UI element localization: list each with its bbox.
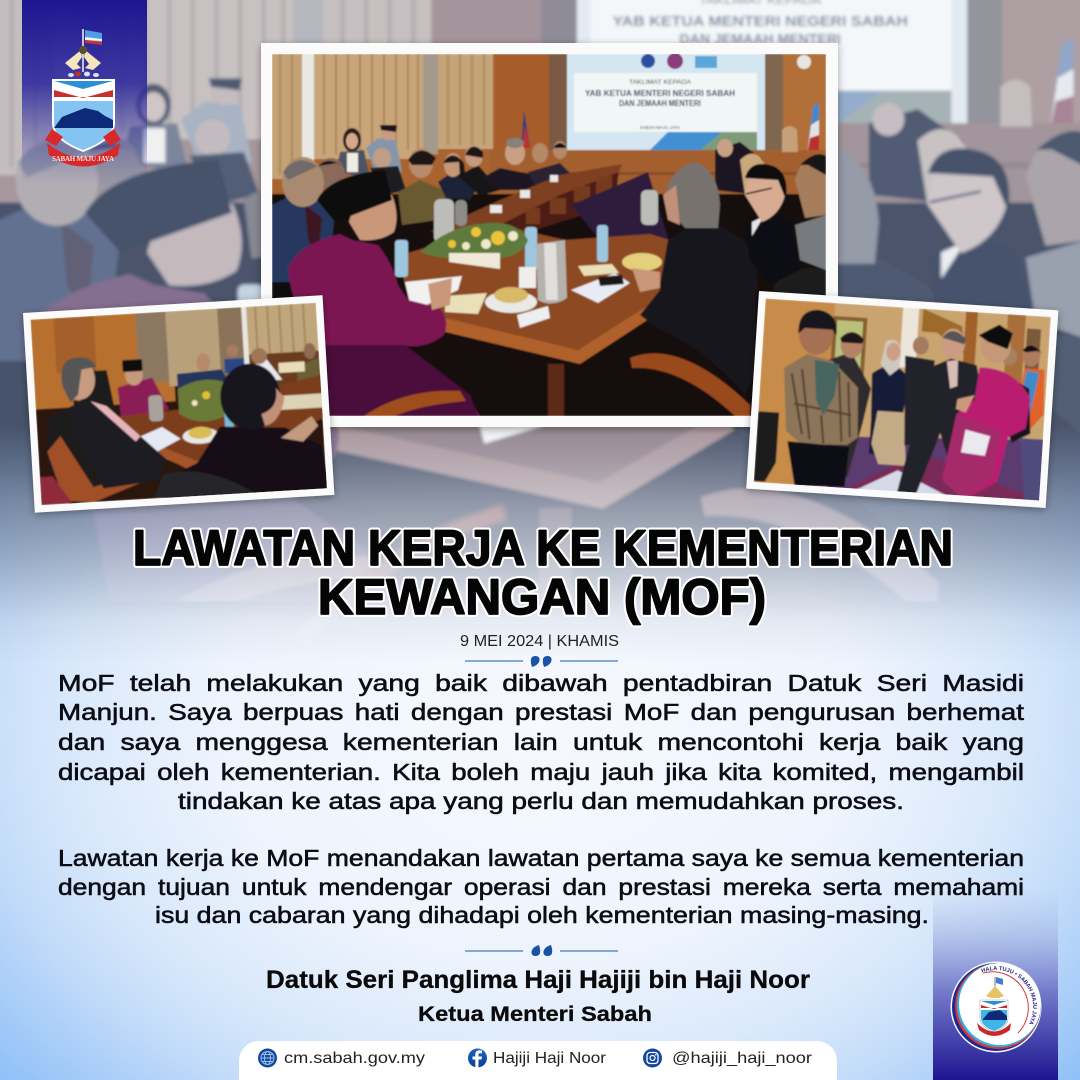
quote paragraph 1: dan saya menggesa kementerian lain untuk mencontohi kerja baik yang [58, 729, 1024, 755]
icon: instagram [643, 1048, 662, 1068]
quote paragraph 1 [58, 670, 1025, 814]
top-left blue band [22, 0, 147, 185]
quote paragraph 1: Manjun. Saya berpuas hati dengan prestasi MoF dan pengurusan berhemat [58, 699, 1025, 725]
main photo [261, 43, 838, 427]
quote paragraph 1: dicapai oleh kementerian. Kita boleh maju jauh jika kita komited, mengambil [58, 759, 1024, 785]
quote paragraph 2: isu dan cabaran yang dihadapi oleh kementerian masing-masing. [155, 902, 929, 928]
Sabah coat of arms: SABAH MAJU JAYA [52, 155, 114, 163]
instagram handle: @hajiji_haji_noor [672, 1050, 813, 1067]
Hala Tuju badge logo [950, 962, 1042, 1052]
website: cm.sabah.gov.my [284, 1050, 425, 1067]
facebook name: Hajiji Haji Noor [493, 1050, 607, 1067]
quote divider bottom [465, 945, 618, 956]
icon: globe [258, 1048, 277, 1068]
contact bar [239, 1041, 837, 1080]
quote divider top [465, 656, 618, 667]
quote paragraph 2: dengan tujuan untuk mendengar operasi dan prestasi mereka serta memahami [58, 874, 1024, 900]
date: 9 MEI 2024 | KHAMIS [460, 633, 619, 650]
quote paragraph 1: MoF telah melakukan yang baik dibawah pentadbiran Datuk Seri Masidi [58, 670, 1024, 696]
quote paragraph 2: Lawatan kerja ke MoF menandakan lawatan pertama saya ke semua kementerian [58, 845, 1024, 871]
photo frame [261, 43, 838, 427]
quote paragraph 2 [58, 845, 1024, 928]
quote paragraph 1: tindakan ke atas apa yang perlu dan memudahkan proses. [178, 788, 904, 814]
icon: facebook [468, 1048, 487, 1068]
speaker role: Ketua Menteri Sabah [418, 1002, 652, 1026]
Sabah coat of arms [45, 29, 121, 166]
title [133, 520, 953, 625]
Hala Tuju badge logo: HALA TUJU • SABAH MAJU JAYA [981, 966, 1037, 1024]
right photo [746, 291, 1058, 508]
speaker name: Datuk Seri Panglima Haji Hajiji bin Haji Noor [266, 966, 810, 994]
left photo [23, 295, 334, 513]
bottom-right blue band [933, 885, 1058, 1080]
